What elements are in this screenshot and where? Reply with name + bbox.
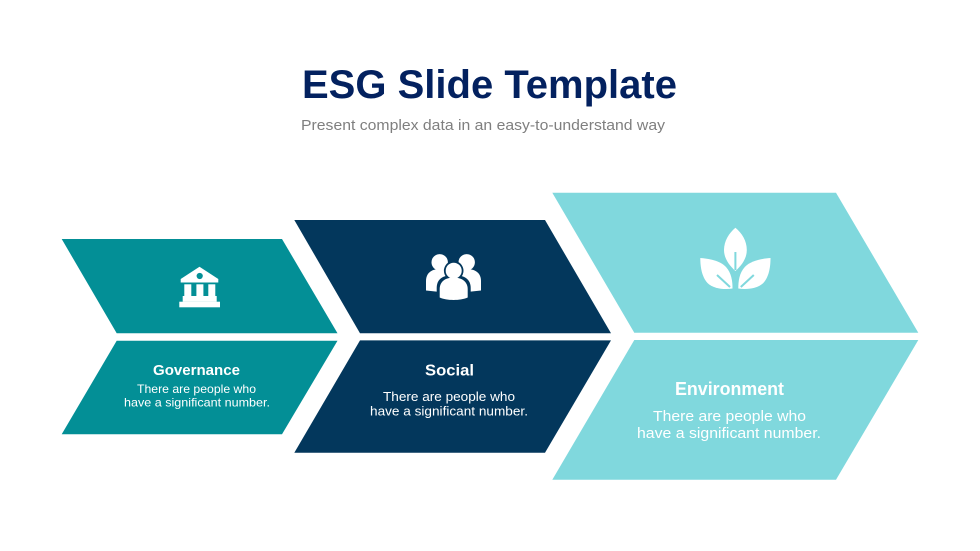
panel: governance	[62, 239, 337, 434]
governance description: There are people who	[137, 382, 256, 396]
governance lower chevron	[62, 341, 337, 434]
environment upper chevron	[552, 193, 918, 333]
subtitle: Present complex data in an easy-to-understand way	[301, 117, 666, 134]
governance description	[124, 382, 270, 410]
environment lower chevron	[552, 340, 918, 480]
governance upper chevron	[62, 239, 337, 333]
social heading: Social	[425, 363, 474, 380]
social upper chevron	[294, 220, 611, 333]
title: ESG Slide Template	[302, 63, 677, 107]
governance description: have a significant number.	[124, 396, 270, 410]
environment description: There are people who	[653, 409, 806, 425]
social lower chevron	[294, 340, 611, 453]
panel: environment	[552, 193, 918, 480]
social description: There are people who	[383, 389, 515, 404]
panel: social	[294, 220, 611, 453]
environment description: have a significant number.	[637, 426, 821, 442]
environment description	[637, 409, 821, 442]
environment heading: Environment	[675, 379, 784, 399]
icon: bank building	[179, 267, 220, 307]
social description	[370, 389, 528, 419]
icon: group of people	[426, 254, 481, 302]
governance heading: Governance	[153, 363, 240, 379]
icon: three leaves	[700, 228, 770, 289]
social description: have a significant number.	[370, 404, 528, 419]
